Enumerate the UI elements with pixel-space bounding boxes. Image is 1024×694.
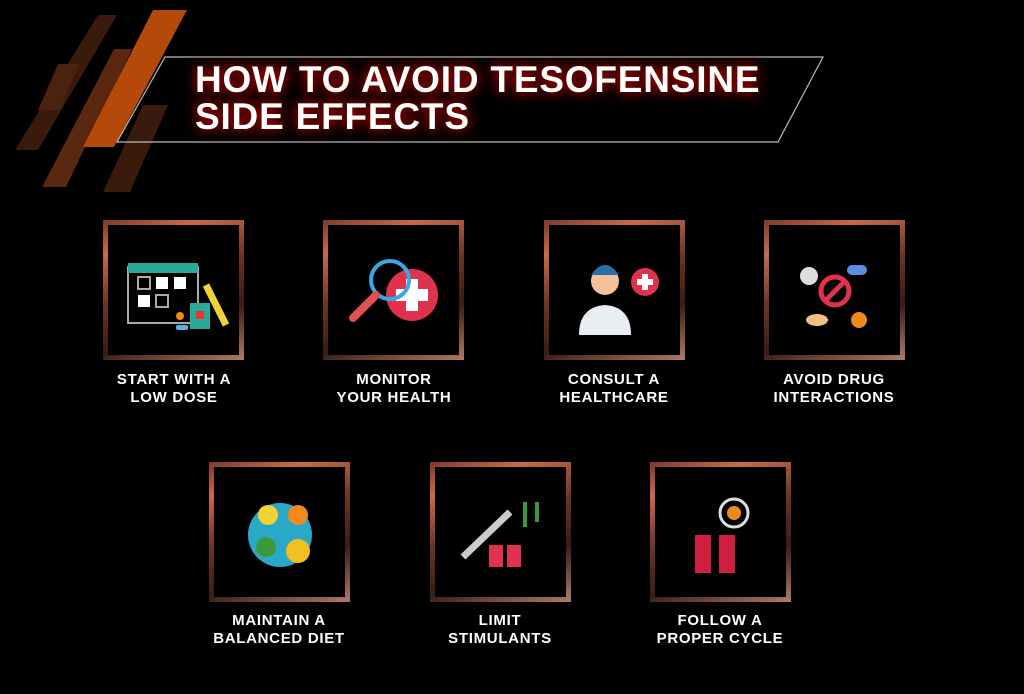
label: maintain a balanced diet xyxy=(213,612,345,647)
icon: doctor xyxy=(579,265,659,335)
label: avoid drug interactions: INTERACTIONS xyxy=(774,389,894,406)
label: consult a healthcare xyxy=(559,371,669,406)
title: SIDE EFFECTS xyxy=(195,96,470,137)
panel: follow a proper cycle xyxy=(650,462,791,602)
icon: syringe and vials xyxy=(460,502,539,567)
label: start with a low dose: START WITH A xyxy=(117,371,231,388)
decorative stripes xyxy=(15,10,187,192)
icon: no drugs xyxy=(800,265,867,328)
title xyxy=(116,56,824,143)
panel: maintain a balanced diet xyxy=(209,462,350,602)
label: consult a healthcare: HEALTHCARE xyxy=(559,389,669,406)
label: monitor your health xyxy=(336,371,451,406)
icon: diet plate xyxy=(248,503,312,567)
panel: start with a low dose xyxy=(103,220,244,360)
label: avoid drug interactions xyxy=(774,371,894,406)
label: maintain a balanced diet: BALANCED DIET xyxy=(213,630,345,647)
label: consult a healthcare: CONSULT A xyxy=(568,371,660,388)
label: monitor your health: MONITOR xyxy=(356,371,432,388)
label: start with a low dose: LOW DOSE xyxy=(130,389,218,406)
label: start with a low dose xyxy=(117,371,231,406)
label: maintain a balanced diet: MAINTAIN A xyxy=(232,612,326,629)
label: monitor your health: YOUR HEALTH xyxy=(337,389,451,406)
label: limit stimulants: STIMULANTS xyxy=(448,630,552,647)
icon: cycle vials xyxy=(695,498,750,573)
icon: calendar and syringe xyxy=(127,263,230,330)
label: avoid drug interactions: AVOID DRUG xyxy=(783,371,885,388)
label: limit stimulants: LIMIT xyxy=(479,612,521,629)
label: limit stimulants xyxy=(448,612,552,647)
label: follow a proper cycle: PROPER CYCLE xyxy=(657,630,783,647)
label: follow a proper cycle xyxy=(657,612,783,647)
icon: magnifier medical xyxy=(349,259,438,322)
title: HOW TO AVOID TESOFENSINE xyxy=(195,59,760,100)
panel: consult a healthcare xyxy=(544,220,685,360)
panel: monitor your health xyxy=(323,220,464,360)
panel: avoid drug interactions xyxy=(764,220,905,360)
label: follow a proper cycle: FOLLOW A xyxy=(677,612,763,629)
panel: limit stimulants xyxy=(430,462,571,602)
